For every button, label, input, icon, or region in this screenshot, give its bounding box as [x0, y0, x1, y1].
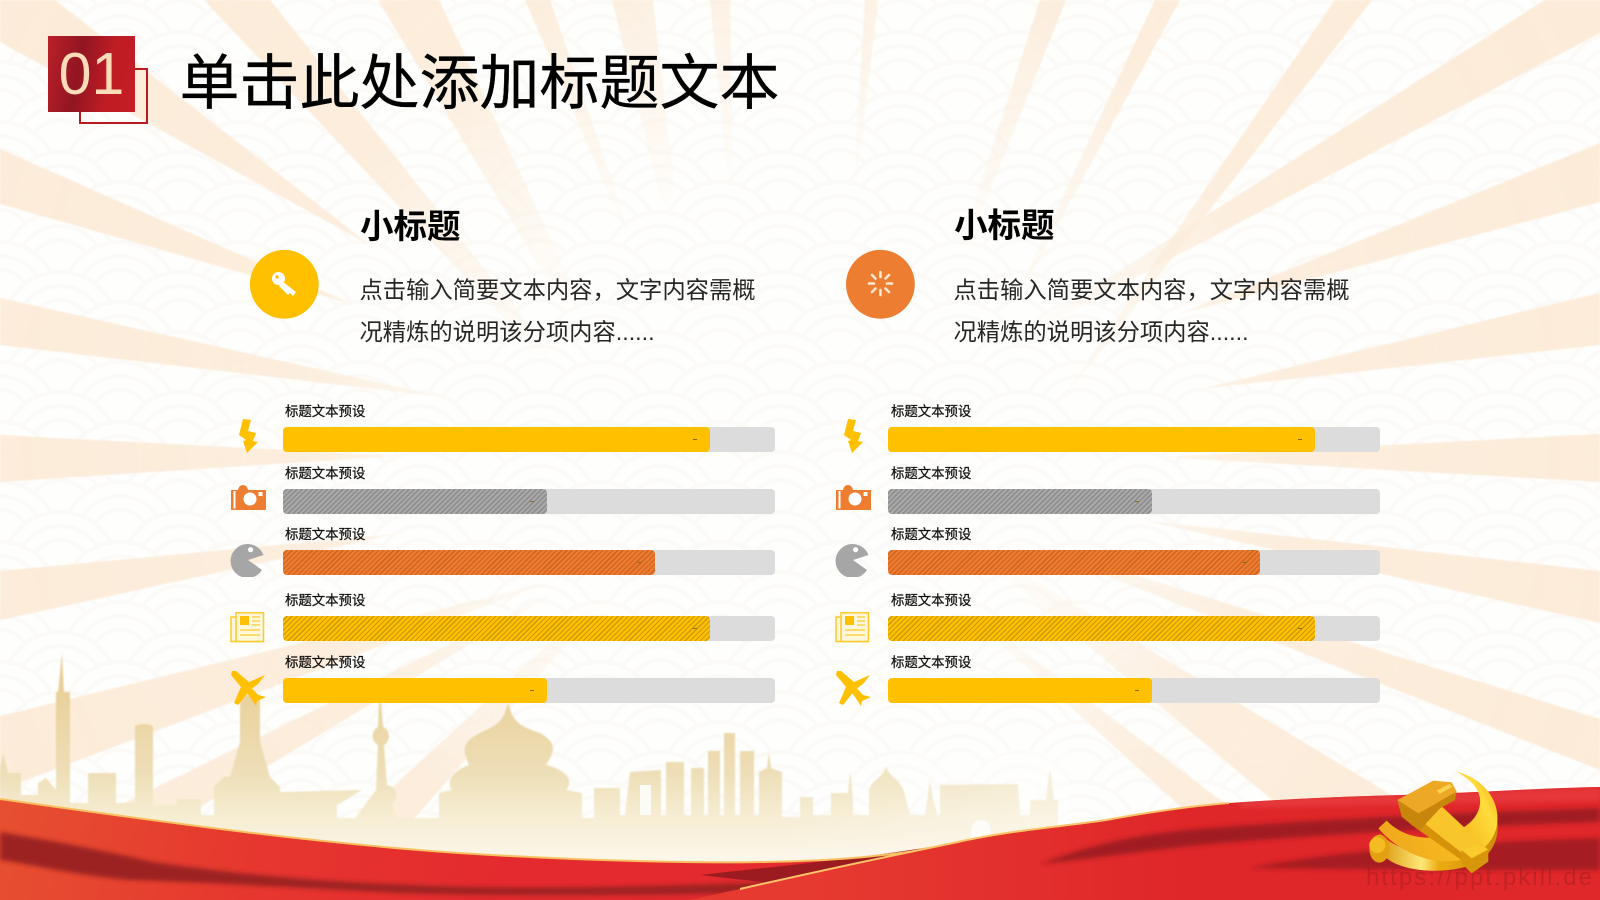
icon: camera right — [836, 485, 871, 510]
left bar 3: 标题文本预设 — [285, 527, 365, 542]
right bar 2: 标题文本预设 — [891, 466, 971, 481]
badge number — [48, 36, 135, 112]
right body text — [954, 277, 1350, 345]
watermark: https://ppt.pkill.de — [1366, 864, 1592, 891]
left bar 2: 标题文本预设 — [285, 466, 365, 481]
icon: airplane — [231, 671, 266, 706]
right body text: 况精炼的说明该分项内容...... — [954, 319, 1249, 345]
icon: airplane right — [836, 671, 871, 706]
left subheading: 小标题 — [360, 209, 460, 246]
badge number: 01 — [59, 41, 124, 107]
left body text: 点击输入简要文本内容，文字内容需概 — [360, 277, 756, 303]
right bar 4: 标题文本预设 — [891, 593, 971, 608]
icon: gold hammer and sickle emblem — [1369, 772, 1498, 874]
right bar 3: 标题文本预设 — [891, 527, 971, 542]
right body text: 点击输入简要文本内容，文字内容需概 — [954, 277, 1350, 303]
icon: spinner in orange circle — [846, 250, 915, 319]
icon: pacman right — [836, 544, 868, 577]
heading number badge — [48, 36, 148, 124]
left body text: 况精炼的说明该分项内容...... — [360, 319, 655, 345]
left bar 4: 标题文本预设 — [285, 593, 365, 608]
icon: lightning — [239, 419, 258, 453]
left bar 5: 标题文本预设 — [285, 655, 365, 670]
left body text — [360, 277, 756, 345]
icon: key in yellow circle — [250, 250, 319, 319]
title: 单击此处添加标题文本 — [180, 50, 780, 117]
right subheading: 小标题 — [954, 208, 1054, 245]
left bar 1: 标题文本预设 — [285, 404, 365, 419]
icon: newspaper right — [835, 612, 870, 642]
icon: pacman — [230, 544, 264, 577]
badge outline frame — [79, 68, 148, 124]
icon: camera — [231, 485, 266, 510]
red ribbon banner — [0, 787, 1600, 900]
right bar 1: 标题文本预设 — [891, 404, 971, 419]
icon: newspaper — [230, 612, 264, 642]
icon: lightning right — [844, 419, 863, 453]
right bar 5: 标题文本预设 — [891, 655, 971, 670]
